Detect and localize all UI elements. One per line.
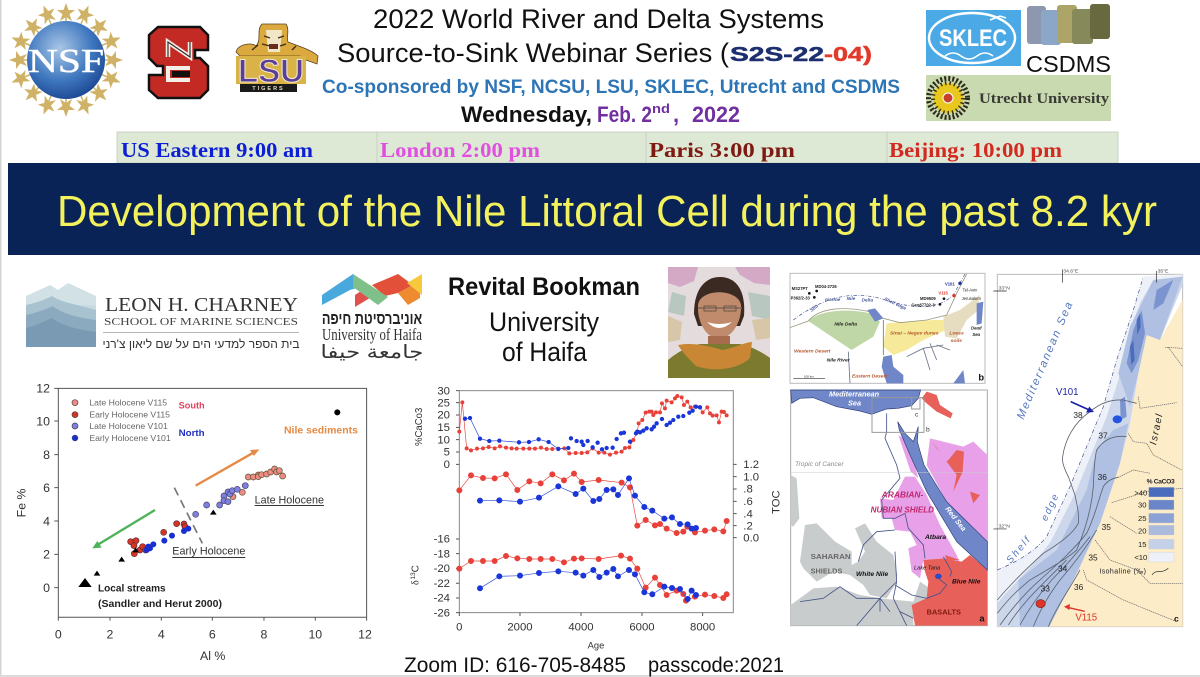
salinity values — [1041, 410, 1111, 593]
x title: Age — [588, 640, 604, 650]
salinity values: 36 — [1074, 582, 1084, 592]
legend: Early Holocene V115 — [89, 410, 170, 420]
Red Sea label: Red Sea — [943, 505, 968, 533]
left labels CaCO3: 20 — [437, 410, 450, 422]
V101 marker — [1056, 387, 1122, 423]
late V101 points — [193, 483, 248, 517]
title banner: Development of the Nile Littoral Cell during the past 8.2 kyr — [57, 187, 1157, 236]
y tick labels: 6 — [43, 481, 50, 495]
salinity values: 37 — [1098, 430, 1108, 440]
map c: CaCO3 shelf — [993, 269, 1183, 627]
d13C blue series — [480, 569, 696, 599]
shelf edge dash line — [997, 277, 1143, 570]
TOC red series — [459, 474, 727, 533]
logo: CSDMS: CSDMS — [1026, 51, 1111, 77]
scale bar: 100 km — [804, 374, 814, 378]
river labels: Atbara — [924, 534, 946, 541]
legend CaCO3 — [1099, 478, 1175, 575]
time zone table: London 2:00 pm — [380, 138, 541, 162]
logo: LSU tiger: LSU — [238, 53, 304, 89]
degree labels: 33°N — [999, 285, 1010, 291]
salinity values: 35 — [1088, 553, 1098, 563]
river labels: Lake Tana — [914, 565, 940, 571]
map frame — [997, 274, 1183, 627]
logo: Utrecht University — [926, 75, 1111, 121]
italic place labels: Nile Delta — [834, 321, 857, 327]
shelf outer band — [997, 274, 1183, 627]
South label: South — [179, 401, 205, 411]
y tick labels: 10 — [36, 414, 50, 428]
plot frame — [459, 391, 733, 613]
x tick labels: 6 — [209, 627, 216, 641]
Local streams label: Local streams — [98, 583, 166, 594]
Shelf edge label: Shelf — [1005, 534, 1034, 566]
grey Saharan shields — [791, 475, 930, 626]
x labels: 8000 — [690, 621, 715, 633]
shelf 40 percent — [1130, 313, 1141, 365]
x tick labels: 4 — [158, 627, 165, 641]
italic place labels: marine — [825, 297, 841, 302]
early V101 points — [144, 526, 191, 553]
TOC blue points — [480, 478, 696, 529]
logo: NSF: NSF — [28, 43, 104, 80]
left labels d13C: -26 — [434, 607, 450, 619]
Arabian Nubian shield label: NUBIAN SHIELD — [871, 505, 934, 514]
date line: nd — [652, 101, 670, 116]
speaker name: University — [489, 307, 599, 337]
delta inset boxes — [872, 398, 924, 432]
river labels: Blue Nile — [952, 579, 981, 586]
time zone table: US Eastern 9:00 am — [121, 138, 314, 162]
right labels TOC: .8 — [743, 484, 753, 496]
italic place labels: Eastern Desert — [852, 373, 888, 379]
inset letters — [915, 411, 930, 434]
left labels CaCO3: 10 — [437, 434, 450, 446]
title — [337, 4, 872, 68]
Israel label: Israel — [1148, 412, 1166, 446]
logo: Charney School of Marine Sciences: SCHOOL OF MARINE SCIENCES — [104, 316, 298, 328]
right labels TOC: .2 — [743, 520, 753, 532]
Lake Tana — [935, 574, 942, 579]
left labels CaCO3 — [437, 385, 450, 471]
x labels: 0 — [456, 621, 462, 633]
x tick labels — [55, 627, 372, 641]
time zone table — [117, 132, 1118, 163]
italic place labels — [794, 296, 982, 379]
italic place labels: Sinai – Negev dunes — [890, 331, 939, 337]
y title d13C: δ — [410, 580, 421, 585]
legend: Late Holocene V101 — [89, 421, 168, 431]
left labels d13C: -22 — [434, 578, 450, 590]
river labels — [856, 534, 981, 586]
left labels d13C: -18 — [434, 548, 450, 560]
Saharan shields label: SAHARAN — [811, 552, 851, 561]
labels: V115 — [938, 291, 948, 296]
logo: Utrecht University: Utrecht University — [979, 91, 1110, 107]
co-sponsors line: Co-sponsored by NSF, NCSU, LSU, SKLEC, Utrecht and CSDMS — [322, 76, 900, 98]
title: S2S-22 — [730, 44, 824, 66]
legend CaCO3: 20 — [1138, 526, 1147, 535]
x tick labels: 12 — [358, 627, 372, 641]
basalts — [912, 392, 987, 626]
y tick labels: 12 — [36, 382, 50, 396]
Late Holocene label: Late Holocene — [255, 494, 324, 506]
Nile sediments point — [334, 409, 340, 415]
degree labels: 34.6°E — [1063, 269, 1079, 275]
V115 marker — [1036, 600, 1097, 624]
x labels: 6000 — [629, 621, 655, 633]
shelf 25-30 percent — [1120, 280, 1173, 420]
logo: Charney School of Marine Sciences — [26, 283, 300, 351]
labels: V101 — [945, 281, 955, 286]
Early Holocene label: Early Holocene — [172, 546, 245, 558]
CaCO3 blue points — [465, 407, 700, 449]
delta area — [808, 311, 880, 350]
speaker name: Revital Bookman — [448, 273, 640, 301]
V101 V115 markers — [952, 282, 962, 297]
italic place labels: Sub — [809, 303, 819, 313]
dunes — [883, 320, 950, 355]
left labels d13C: -20 — [434, 563, 450, 575]
y tick labels — [36, 382, 50, 595]
x labels: 4000 — [568, 621, 594, 633]
green arrow — [92, 510, 155, 548]
plot axes — [54, 388, 367, 621]
italic place labels: Western Desert — [794, 349, 831, 355]
local stream triangles — [78, 510, 217, 587]
left labels CaCO3: 15 — [437, 422, 450, 434]
panel letter b: b — [978, 372, 984, 382]
map a: Red Sea region — [791, 389, 987, 626]
y title TOC: TOC — [770, 490, 782, 514]
map frame — [790, 273, 985, 383]
CaCO3 blue series — [465, 418, 568, 449]
legend CaCO3: >40 — [1134, 489, 1147, 498]
italic place labels: soils — [951, 338, 962, 344]
core points — [808, 290, 945, 306]
logo: SKLEC: SKLEC — [939, 25, 1007, 52]
icon: waves — [26, 283, 96, 347]
italic place labels: Shelf edge — [884, 296, 907, 311]
rivers — [848, 320, 950, 383]
italic place labels: Sea — [972, 332, 981, 337]
x tick labels: 0 — [55, 627, 62, 641]
x tick labels: 10 — [308, 627, 322, 641]
y title d13C: 13 — [410, 572, 417, 580]
scatter chart: Fe vs Al — [15, 382, 372, 663]
d13C red series — [459, 556, 727, 601]
panel letter a: a — [979, 614, 985, 624]
Mediterranean label: Mediterranean — [829, 389, 880, 398]
shelf edge line — [793, 274, 965, 320]
legend CaCO3: Isohaline (‰) — [1099, 568, 1146, 575]
time zone table: Beijing: 10:00 pm — [889, 138, 1063, 162]
Shelf edge label: edge — [1039, 491, 1062, 523]
y tick labels: 4 — [43, 514, 50, 528]
left labels d13C: -16 — [434, 534, 450, 546]
labels: P362/2-33 — [791, 295, 811, 300]
degree labels: 32°N — [999, 523, 1010, 529]
right labels TOC: 0.0 — [743, 532, 759, 544]
scale bar — [793, 374, 825, 378]
left labels CaCO3: 5 — [444, 447, 450, 459]
Shelf edge label — [1005, 491, 1062, 566]
zoom info: Zoom ID: 616-705-8485 — [404, 654, 626, 677]
left labels d13C — [434, 534, 450, 619]
TOC blue series — [480, 478, 696, 529]
date line: Feb. 2 — [597, 102, 652, 127]
title: 2022 World River and Delta Systems — [373, 4, 824, 34]
date line: 2022 — [692, 102, 740, 127]
labels — [791, 281, 981, 308]
degree labels: 35°E — [1158, 269, 1169, 275]
labels: Tel-Aviv — [963, 287, 978, 292]
logo: LSU tiger — [236, 24, 318, 92]
Nile sediments label: Nile sediments — [284, 425, 358, 436]
logo: LSU tiger: TIGERS — [252, 86, 285, 92]
labels: MS27PT — [792, 286, 808, 291]
salinity values: 33 — [1041, 583, 1050, 593]
right labels TOC: 1.0 — [743, 471, 759, 483]
Local streams label — [98, 583, 222, 610]
CaCO3 red points — [459, 396, 727, 455]
legend CaCO3: 15 — [1138, 540, 1147, 549]
stacked line chart: CaCO3 TOC d13C — [410, 385, 782, 650]
rivers on land — [1083, 347, 1183, 622]
y title d13C: C — [410, 565, 421, 572]
land — [1049, 300, 1183, 627]
title: -04) — [824, 44, 872, 66]
logo: Charney School of Marine Sciences: LEON H. CHARNEY — [105, 294, 298, 316]
legend: Late Holocene V115 — [89, 398, 167, 408]
V101 marker: V101 — [1056, 387, 1079, 398]
degree ticks — [993, 269, 1156, 529]
right labels TOC: .4 — [743, 508, 753, 520]
Mediterranean sea — [791, 390, 921, 414]
Saharan shields label: SHIELDS — [811, 566, 842, 575]
speaker name — [448, 273, 640, 367]
shelf 15 percent — [997, 277, 1183, 627]
x labels — [456, 621, 715, 633]
map b: Nile delta — [790, 273, 985, 383]
legend: Early Holocene V101 — [89, 433, 171, 443]
axis title: Al: Al % — [200, 649, 225, 663]
y tick labels: 2 — [43, 548, 50, 562]
Saharan shields label — [811, 552, 851, 575]
d13C red points — [459, 556, 727, 601]
Mediterranean label — [829, 389, 880, 408]
legend CaCO3: 25 — [1138, 514, 1147, 523]
date line: , — [673, 102, 679, 127]
river labels: White Nile — [856, 571, 888, 578]
right labels TOC: 1.2 — [743, 459, 759, 471]
x labels: 2000 — [507, 621, 533, 633]
loess — [943, 295, 980, 338]
Tropic of Cancer: Tropic of Cancer — [795, 461, 844, 468]
labels: MD9509 — [920, 296, 936, 301]
Red Sea — [898, 422, 987, 570]
logo: University of Haifa: جامعة حيفا — [321, 342, 423, 362]
y tick labels: 0 — [43, 581, 50, 595]
Arabian Nubian shield label: ARABIAN- — [881, 491, 924, 500]
left labels d13C: -24 — [434, 593, 450, 605]
shelf 20 percent — [1018, 277, 1183, 627]
labels: Geo87702-3 — [911, 303, 935, 308]
isohalines — [997, 400, 1137, 627]
V115 marker: V115 — [1075, 613, 1097, 624]
italic place labels: Delta — [862, 298, 873, 303]
divider dashed line — [174, 488, 202, 543]
date line — [461, 101, 740, 127]
ticks — [456, 391, 737, 616]
right labels TOC: .6 — [743, 496, 753, 508]
logo: NSF — [8, 2, 124, 118]
x tick labels: 8 — [261, 627, 268, 641]
speaker photo — [668, 267, 770, 378]
icon: chevrons — [322, 274, 422, 307]
inset letters: c — [915, 411, 919, 418]
right labels TOC — [743, 459, 759, 544]
CaCO3 red series — [459, 396, 727, 455]
salinity values: 35 — [1102, 522, 1111, 532]
sea edge coast — [790, 274, 967, 328]
zoom info: passcode:2021 — [648, 654, 784, 677]
italic place labels: Nile River — [827, 358, 851, 364]
rivers — [800, 413, 952, 626]
y title CaCO3: %CaCo3 — [414, 407, 425, 446]
degree labels — [999, 269, 1169, 529]
italic place labels: Loess — [949, 331, 964, 337]
logo: University of Haifa — [321, 274, 423, 362]
pink shields — [880, 435, 987, 578]
TOC red points — [459, 474, 727, 533]
logo: Charney School of Marine Sciences: בית הספר למדעי הים על שם ליאון צ'רני — [102, 337, 300, 351]
left labels CaCO3: 0 — [444, 459, 450, 471]
panel letter c: c — [1174, 613, 1179, 623]
orange arrow — [196, 449, 259, 486]
y tick labels: 8 — [43, 448, 50, 462]
labels: MD04-2726 — [815, 284, 837, 289]
late V115 points — [230, 466, 286, 500]
time zone table: Paris 3:00 pm — [649, 138, 796, 162]
date line: Wednesday, — [461, 102, 592, 127]
Arabian Nubian shield label — [871, 491, 934, 514]
early V115 points — [128, 521, 188, 557]
inset letters: b — [926, 427, 930, 434]
basalts label: BASALTS — [927, 607, 961, 616]
logo: University of Haifa: אוניברסיטת חיפה — [322, 311, 422, 328]
North label: North — [179, 428, 205, 438]
legend CaCO3: % CaCO3 — [1147, 478, 1175, 485]
left labels CaCO3: 30 — [437, 385, 450, 397]
title: Source-to-Sink Webinar Series ( — [337, 38, 729, 68]
legend — [72, 398, 171, 443]
legend CaCO3: <10 — [1134, 553, 1147, 562]
Mediterranean label: Mediterranean Sea — [1015, 300, 1075, 421]
d13C blue points — [480, 569, 696, 599]
italic place labels: Nile — [847, 296, 856, 301]
Mediterranean label: Sea — [848, 399, 861, 408]
salinity values: 38 — [1073, 410, 1083, 420]
logo: CSDMS — [1026, 4, 1111, 77]
speaker name: of Haifa — [502, 337, 588, 367]
y title d13C — [410, 565, 421, 585]
lakes and waters — [867, 302, 983, 383]
title banner — [8, 163, 1200, 255]
logo: University of Haifa: University of Haifa — [322, 325, 422, 344]
Local streams label: (Sandler and Herut 2000) — [98, 599, 222, 610]
zoom info — [404, 654, 784, 677]
left labels CaCO3: 25 — [437, 397, 450, 409]
salinity values: 36 — [1098, 472, 1107, 482]
logo: SKLEC — [926, 10, 1021, 66]
x tick labels: 2 — [107, 627, 114, 641]
salinity values: 34 — [1058, 563, 1068, 573]
labels: Jerusalem — [962, 296, 981, 301]
legend CaCO3: 30 — [1138, 501, 1147, 510]
italic place labels: Dead — [971, 325, 982, 330]
logo: NC State — [149, 27, 208, 98]
map frame — [791, 390, 987, 626]
axis title: Fe: Fe % — [15, 489, 29, 517]
